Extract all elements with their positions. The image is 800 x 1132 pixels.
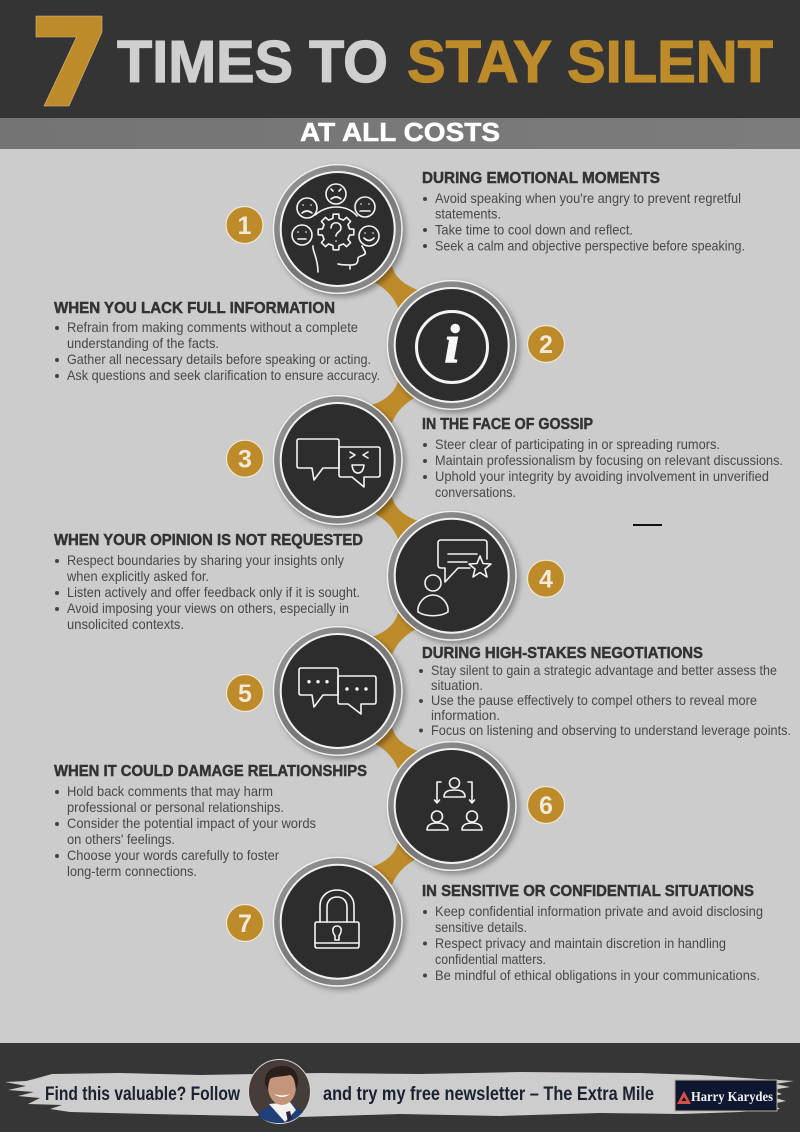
title: stay silent: STAY SILENT — [407, 29, 773, 95]
text block 6: when it could damage relationships: Hold back comments that may harm — [67, 783, 273, 799]
text block 4: when your opinion is not requested: Listen actively and offer feedback only if it is sought. — [67, 584, 360, 600]
subtitle band: AT ALL COSTS — [300, 117, 500, 147]
badge 2 — [528, 326, 564, 362]
text block 6: when it could damage relationships: Choose your words carefully to foster — [67, 847, 279, 863]
badge 6 — [528, 786, 564, 824]
text block 3: in the face of gossip: IN THE FACE OF GOSSIP — [422, 416, 593, 433]
text block 4: when your opinion is not requested: Respect boundaries by sharing your insights only — [67, 552, 344, 568]
icon: one person splitting into two — [427, 778, 482, 830]
icon: info: i — [444, 314, 460, 374]
text block 7: in sensitive or confidential situations: Be mindful of ethical obligations in your communications. — [435, 967, 760, 983]
text block 1: during emotional moments: statements. — [435, 206, 501, 222]
text block 5: during high-stakes negotiations: Use the pause effectively to compel others to reveal more — [431, 692, 757, 708]
text block 6: when it could damage relationships: long-term connections. — [67, 863, 197, 879]
step 2: circle with info icon — [387, 280, 517, 410]
text block 2: when you lack full information: understanding of the facts. — [67, 335, 219, 351]
text block 3: in the face of gossip: Steer clear of participating in or spreading rumors. — [435, 436, 720, 452]
badge 7: 7 — [238, 910, 252, 938]
text block 6: when it could damage relationships: WHEN IT COULD DAMAGE RELATIONSHIPS — [54, 763, 367, 780]
text block 5: during high-stakes negotiations: DURING HIGH-STAKES NEGOTIATIONS — [422, 645, 703, 662]
badge 5 — [226, 674, 264, 712]
subtitle band — [0, 117, 800, 149]
text block 2: when you lack full information: Refrain from making comments without a complete — [67, 319, 358, 335]
text block 7: in sensitive or confidential situations: Keep confidential information private and avoid disclosing — [435, 903, 763, 919]
icon: two chat bubbles with dots — [299, 668, 376, 714]
footer — [0, 1043, 800, 1132]
big number 7 — [36, 16, 102, 106]
step 5: circle with chat bubbles icon — [273, 626, 403, 756]
text block 7: in sensitive or confidential situations: confidential matters. — [435, 951, 546, 967]
text block 3: in the face of gossip: conversations. — [435, 484, 516, 500]
text block 5: during high-stakes negotiations — [419, 645, 791, 738]
badge 7 — [226, 904, 264, 942]
text block 2: when you lack full information: Ask questions and seek clarification to ensure accuracy. — [67, 367, 380, 383]
text block 7: in sensitive or confidential situations: Respect privacy and maintain discretion in handling — [435, 935, 726, 951]
step 7: circle with padlock icon — [273, 857, 403, 987]
text block 4: when your opinion is not requested: when explicitly asked for. — [66, 568, 209, 584]
footer text left: Find this valuable? Follow — [45, 1084, 240, 1105]
text block 1: during emotional moments: Seek a calm and objective perspective before speaking. — [435, 238, 745, 254]
text block 5: during high-stakes negotiations: information. — [431, 707, 500, 723]
badge 1 — [226, 206, 263, 244]
text block 4: when your opinion is not requested: unsolicited contexts. — [67, 616, 184, 632]
step 6: circle with people hierarchy icon — [387, 741, 517, 871]
text block 3: in the face of gossip: Uphold your integrity by avoiding involvement in unverified — [435, 468, 769, 484]
text block 6: when it could damage relationships — [54, 763, 367, 879]
header band — [0, 0, 800, 118]
icon: speech bubbles with laughing face — [297, 439, 380, 487]
text block 7: in sensitive or confidential situations — [422, 883, 763, 983]
step 1: circle with head and emotions icon — [273, 164, 403, 294]
badge 4 — [528, 560, 564, 597]
icon: head with gear and faces — [292, 184, 379, 272]
badge 5: 5 — [238, 680, 252, 708]
text block 6: when it could damage relationships: on others' feelings. — [67, 831, 175, 847]
portrait — [248, 1060, 310, 1124]
footer text right: and try my free newsletter – The Extra Mile — [323, 1084, 654, 1105]
text block 7: in sensitive or confidential situations: sensitive details. — [435, 919, 527, 935]
badge 4: 4 — [539, 566, 553, 594]
step 4: circle with person and star bubble icon — [387, 511, 517, 641]
badge 3: 3 — [238, 446, 252, 474]
icon: padlock — [315, 890, 359, 948]
icon: person with speech bubble and star — [418, 540, 491, 616]
text block 5: during high-stakes negotiations: situation. — [431, 677, 483, 693]
text block 4: when your opinion is not requested: Avoid imposing your views on others, especially in — [67, 600, 349, 616]
text block 2: when you lack full information: Gather all necessary details before speaking or acting. — [67, 351, 371, 367]
text block 1: during emotional moments — [422, 170, 745, 254]
text block 3: in the face of gossip — [422, 416, 783, 500]
text block 1: during emotional moments: Avoid speaking when you're angry to prevent regretful — [435, 190, 741, 206]
text block 2: when you lack full information: WHEN YOU LACK FULL INFORMATION — [54, 300, 335, 317]
text block 4: when your opinion is not requested — [54, 532, 363, 632]
brush stroke banner — [5, 1072, 794, 1117]
title: times to: TIMES TO — [117, 29, 388, 95]
logo: Harry Karydes: Harry Karydes — [691, 1090, 773, 1105]
badge 2: 2 — [539, 331, 553, 359]
text block 6: when it could damage relationships: professional or personal relationships. — [67, 799, 284, 815]
badge 1: 1 — [238, 212, 252, 240]
logo: Harry Karydes — [675, 1080, 777, 1111]
text block 1: during emotional moments: Take time to cool down and reflect. — [435, 222, 633, 238]
badge 6: 6 — [539, 792, 553, 820]
badge 3 — [226, 440, 264, 477]
text block 7: in sensitive or confidential situations: IN SENSITIVE OR CONFIDENTIAL SITUATIONS — [422, 883, 754, 900]
step 3: circle with gossip bubbles icon — [273, 395, 403, 525]
text block 6: when it could damage relationships: Consider the potential impact of your words — [67, 815, 316, 831]
text block 1: during emotional moments: DURING EMOTIONAL MOMENTS — [422, 170, 660, 187]
gold connectors between circles — [372, 266, 418, 885]
text block 4: when your opinion is not requested: WHEN YOUR OPINION IS NOT REQUESTED — [54, 532, 363, 549]
text block 2: when you lack full information — [54, 300, 380, 383]
